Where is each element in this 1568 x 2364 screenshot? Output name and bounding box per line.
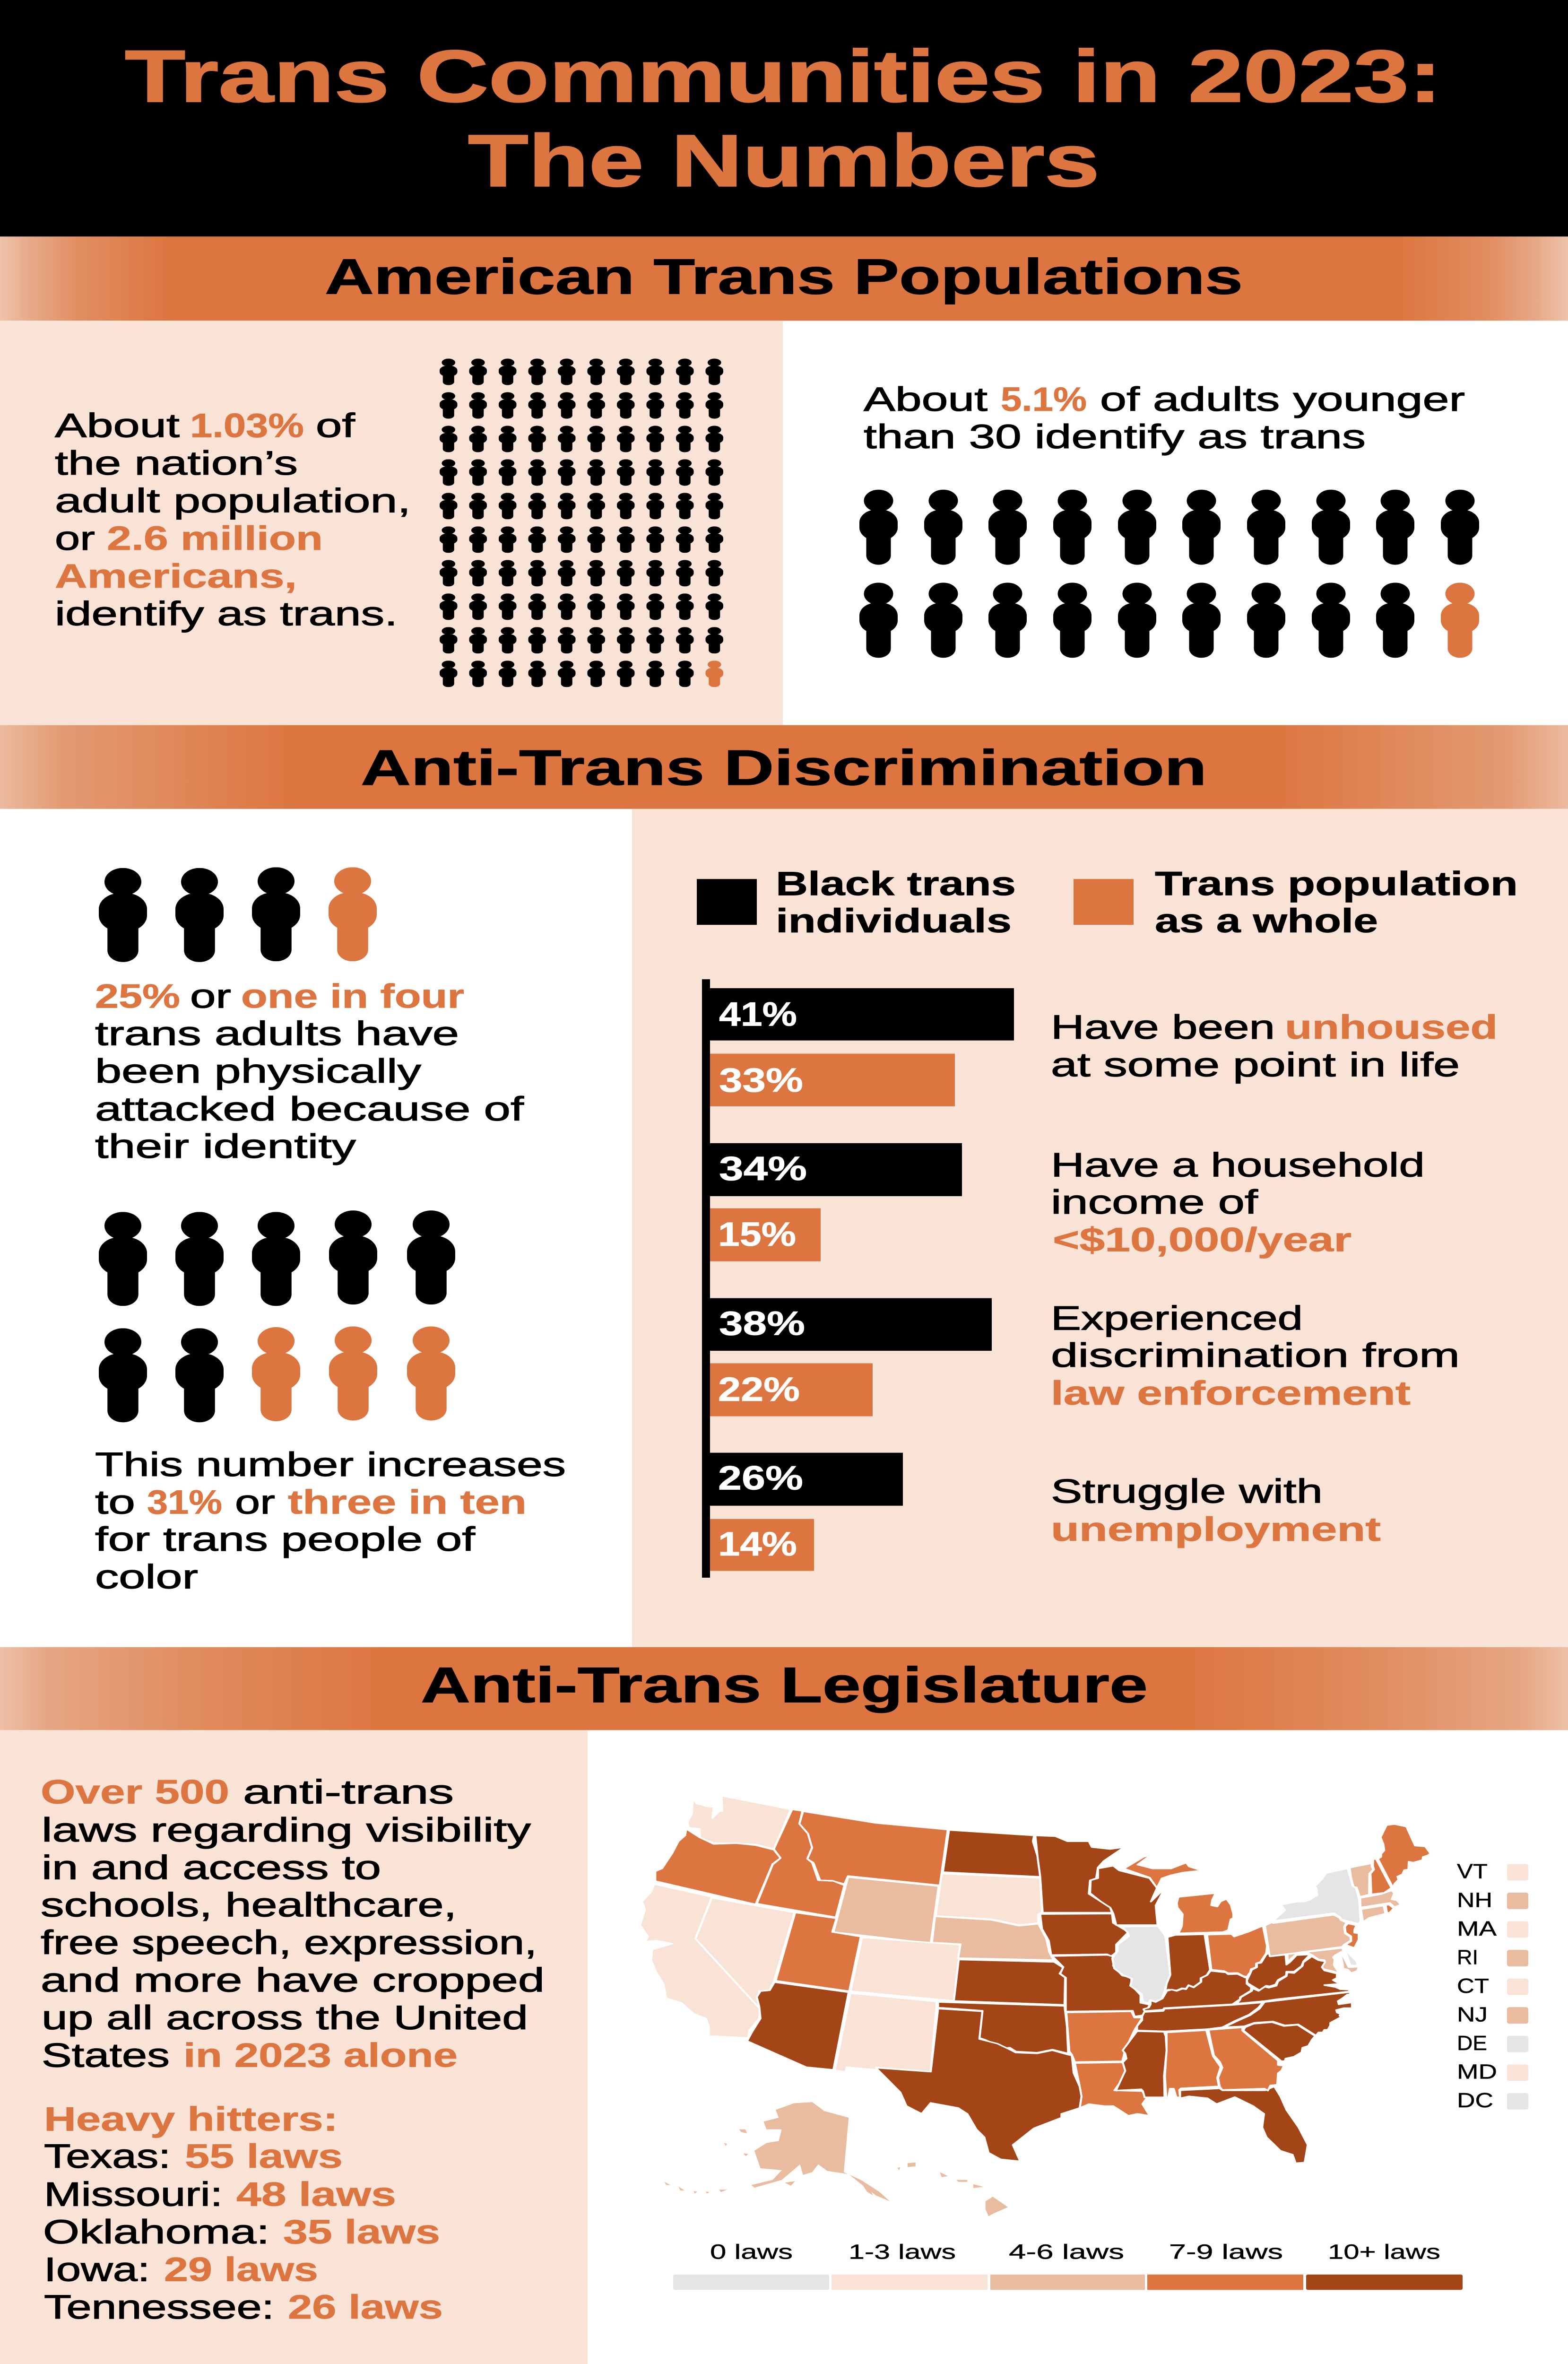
heading band: Anti-Trans Legislature: Anti-Trans Legislature bbox=[421, 1658, 1148, 1713]
text: adult population statistic: or bbox=[55, 520, 95, 557]
map colour scale legend: 4-6 laws bbox=[1009, 2240, 1124, 2263]
chart legend: as a whole bbox=[1155, 902, 1378, 939]
state key legend: NH bbox=[1457, 1888, 1492, 1912]
text: 31 percent for people of color: 31% bbox=[147, 1483, 222, 1521]
text: heavy hitters list: 35 laws bbox=[283, 2213, 440, 2251]
text: younger adults statistic bbox=[864, 381, 1465, 455]
text: over 500 laws: up all across the United bbox=[42, 1999, 528, 2037]
bar captions: Struggle with bbox=[1051, 1473, 1323, 1510]
text: over 500 laws bbox=[41, 1773, 545, 2074]
text: younger adults statistic: than 30 identify as trans bbox=[864, 418, 1366, 455]
state key legend: VT bbox=[1457, 1860, 1488, 1883]
bar chart: 34% bbox=[719, 1150, 807, 1187]
bar captions: law enforcement bbox=[1051, 1374, 1411, 1412]
panel: physical attacks bbox=[95, 867, 566, 1596]
text: over 500 laws: anti-trans bbox=[243, 1773, 454, 1811]
text: adult population statistic: 2.6 million bbox=[107, 520, 323, 557]
state key legend: MA bbox=[1457, 1917, 1497, 1940]
state key legend: RI bbox=[1457, 1945, 1478, 1969]
chart legend: individuals bbox=[776, 902, 1012, 939]
text: adult population statistic: About bbox=[55, 407, 180, 444]
text: adult population statistic: 1.03% bbox=[190, 407, 304, 444]
text: 25 percent attacked bbox=[95, 978, 524, 1165]
bar chart: 41% bbox=[719, 996, 797, 1033]
text: heavy hitters list: Tennessee: bbox=[44, 2288, 274, 2326]
state key legend: DE bbox=[1457, 2031, 1487, 2054]
text: adult population statistic: of bbox=[316, 407, 355, 444]
bar captions: discrimination from bbox=[1051, 1337, 1460, 1374]
text: adult population statistic bbox=[55, 407, 411, 633]
text: 25 percent attacked: their identity bbox=[95, 1128, 356, 1165]
text: 31 percent for people of color: three in ten bbox=[288, 1483, 527, 1521]
text: heavy hitters list: Heavy hitters: bbox=[44, 2100, 338, 2138]
text: adult population statistic: the nation’s bbox=[55, 444, 298, 482]
state key legend: MD bbox=[1457, 2060, 1497, 2083]
map colour scale legend bbox=[673, 2240, 1463, 2290]
header: title bbox=[0, 0, 1568, 236]
chart legend bbox=[697, 865, 1518, 939]
text: 25 percent attacked: or bbox=[190, 978, 231, 1015]
bar chart: 33% bbox=[719, 1061, 803, 1099]
bar chart: 15% bbox=[718, 1216, 796, 1253]
header: title: Trans Communities in 2023: bbox=[125, 35, 1442, 117]
pictogram: 20 people, one highlighted bbox=[859, 490, 1479, 658]
text: over 500 laws: Over 500 bbox=[41, 1773, 229, 1811]
text: over 500 laws: in and access to bbox=[42, 1849, 381, 1886]
bar captions bbox=[1051, 1008, 1498, 1548]
pictogram: three in ten bbox=[99, 1210, 455, 1422]
text: heavy hitters list: Iowa: bbox=[44, 2251, 150, 2288]
text: heavy hitters list: Texas: bbox=[44, 2138, 171, 2175]
map colour scale legend: 0 laws bbox=[710, 2240, 793, 2263]
heading band: Anti-Trans Legislature bbox=[0, 1647, 1568, 1730]
heading band: American Trans Populations: American Trans Populations bbox=[325, 249, 1243, 305]
text: heavy hitters list: Missouri: bbox=[44, 2175, 223, 2213]
bar chart: 38% bbox=[719, 1305, 805, 1342]
text: heavy hitters list: 26 laws bbox=[288, 2288, 443, 2326]
pictogram: 100 people, one highlighted bbox=[440, 359, 723, 687]
text: adult population statistic: adult population, bbox=[55, 482, 411, 520]
map colour scale legend: 7-9 laws bbox=[1169, 2240, 1283, 2263]
state key legend bbox=[1457, 1860, 1528, 2112]
bar captions: Experienced bbox=[1051, 1299, 1303, 1337]
bar captions: unemployment bbox=[1051, 1511, 1381, 1548]
bar chart: 26% bbox=[718, 1460, 803, 1497]
text: 25 percent attacked: attacked because of bbox=[95, 1090, 524, 1128]
map colour scale legend: 1-3 laws bbox=[849, 2240, 956, 2263]
text: 25 percent attacked: 25% bbox=[95, 978, 180, 1015]
choropleth map of the United States bbox=[640, 1796, 1430, 2216]
text: adult population statistic: identify as trans. bbox=[55, 595, 398, 633]
text: 31 percent for people of color: or bbox=[235, 1483, 275, 1521]
text: heavy hitters list bbox=[43, 2100, 443, 2326]
map colour scale legend: 10+ laws bbox=[1328, 2240, 1440, 2263]
bar chart: 14% bbox=[718, 1525, 797, 1563]
bar captions: Have a household bbox=[1051, 1146, 1425, 1184]
bar chart bbox=[702, 979, 1014, 1578]
pictogram: one in four bbox=[99, 867, 377, 962]
bar captions: at some point in life bbox=[1051, 1046, 1460, 1084]
bar captions: Have been bbox=[1051, 1008, 1275, 1046]
text: 31 percent for people of color: color bbox=[95, 1558, 198, 1596]
text: younger adults statistic: 5.1% bbox=[1001, 381, 1087, 418]
chart legend: Trans population bbox=[1155, 865, 1518, 903]
text: over 500 laws: free speech, expression, bbox=[41, 1924, 537, 1962]
panel: legislature text bbox=[0, 1730, 588, 2364]
text: heavy hitters list: Oklahoma: bbox=[43, 2213, 269, 2251]
text: over 500 laws: laws regarding visibility bbox=[42, 1811, 531, 1849]
panel: adult population bbox=[0, 321, 783, 725]
state key legend: NJ bbox=[1457, 2002, 1488, 2026]
state key legend: DC bbox=[1457, 2088, 1493, 2112]
text: 25 percent attacked: trans adults have bbox=[95, 1015, 459, 1052]
heading band: Anti-Trans Discrimination bbox=[0, 725, 1568, 809]
text: 31 percent for people of color: for trans people of bbox=[95, 1521, 476, 1558]
text: 31 percent for people of color: to bbox=[95, 1483, 135, 1521]
header: title: The Numbers bbox=[468, 120, 1100, 202]
bar captions: <$10,000/year bbox=[1053, 1221, 1351, 1259]
text: younger adults statistic: of adults younger bbox=[1100, 381, 1465, 418]
text: adult population statistic: Americans, bbox=[55, 557, 297, 595]
text: over 500 laws: and more have cropped bbox=[41, 1962, 545, 1999]
text: 25 percent attacked: one in four bbox=[241, 978, 464, 1015]
text: heavy hitters list: 29 laws bbox=[164, 2251, 318, 2288]
text: heavy hitters list: 55 laws bbox=[185, 2138, 343, 2175]
chart legend: Black trans bbox=[776, 865, 1016, 903]
text: younger adults statistic: About bbox=[864, 381, 988, 418]
text: over 500 laws: States bbox=[42, 2037, 170, 2074]
text: 25 percent attacked: been physically bbox=[95, 1052, 421, 1090]
bar captions: unhoused bbox=[1285, 1008, 1498, 1046]
text: 31 percent for people of color bbox=[95, 1446, 566, 1596]
panel: discrimination bar chart bbox=[632, 809, 1568, 1647]
text: over 500 laws: in 2023 alone bbox=[183, 2037, 458, 2074]
state key legend: CT bbox=[1457, 1974, 1489, 1997]
bar chart: 22% bbox=[718, 1371, 800, 1408]
bar captions: income of bbox=[1051, 1183, 1258, 1221]
panel: younger adults bbox=[859, 381, 1479, 658]
heading band: American Trans Populations bbox=[0, 236, 1568, 321]
text: over 500 laws: schools, healthcare, bbox=[41, 1886, 457, 1924]
text: 31 percent for people of color: This number increases bbox=[95, 1446, 566, 1483]
text: heavy hitters list: 48 laws bbox=[236, 2175, 396, 2213]
heading band: Anti-Trans Discrimination: Anti-Trans Discrimination bbox=[361, 740, 1207, 796]
